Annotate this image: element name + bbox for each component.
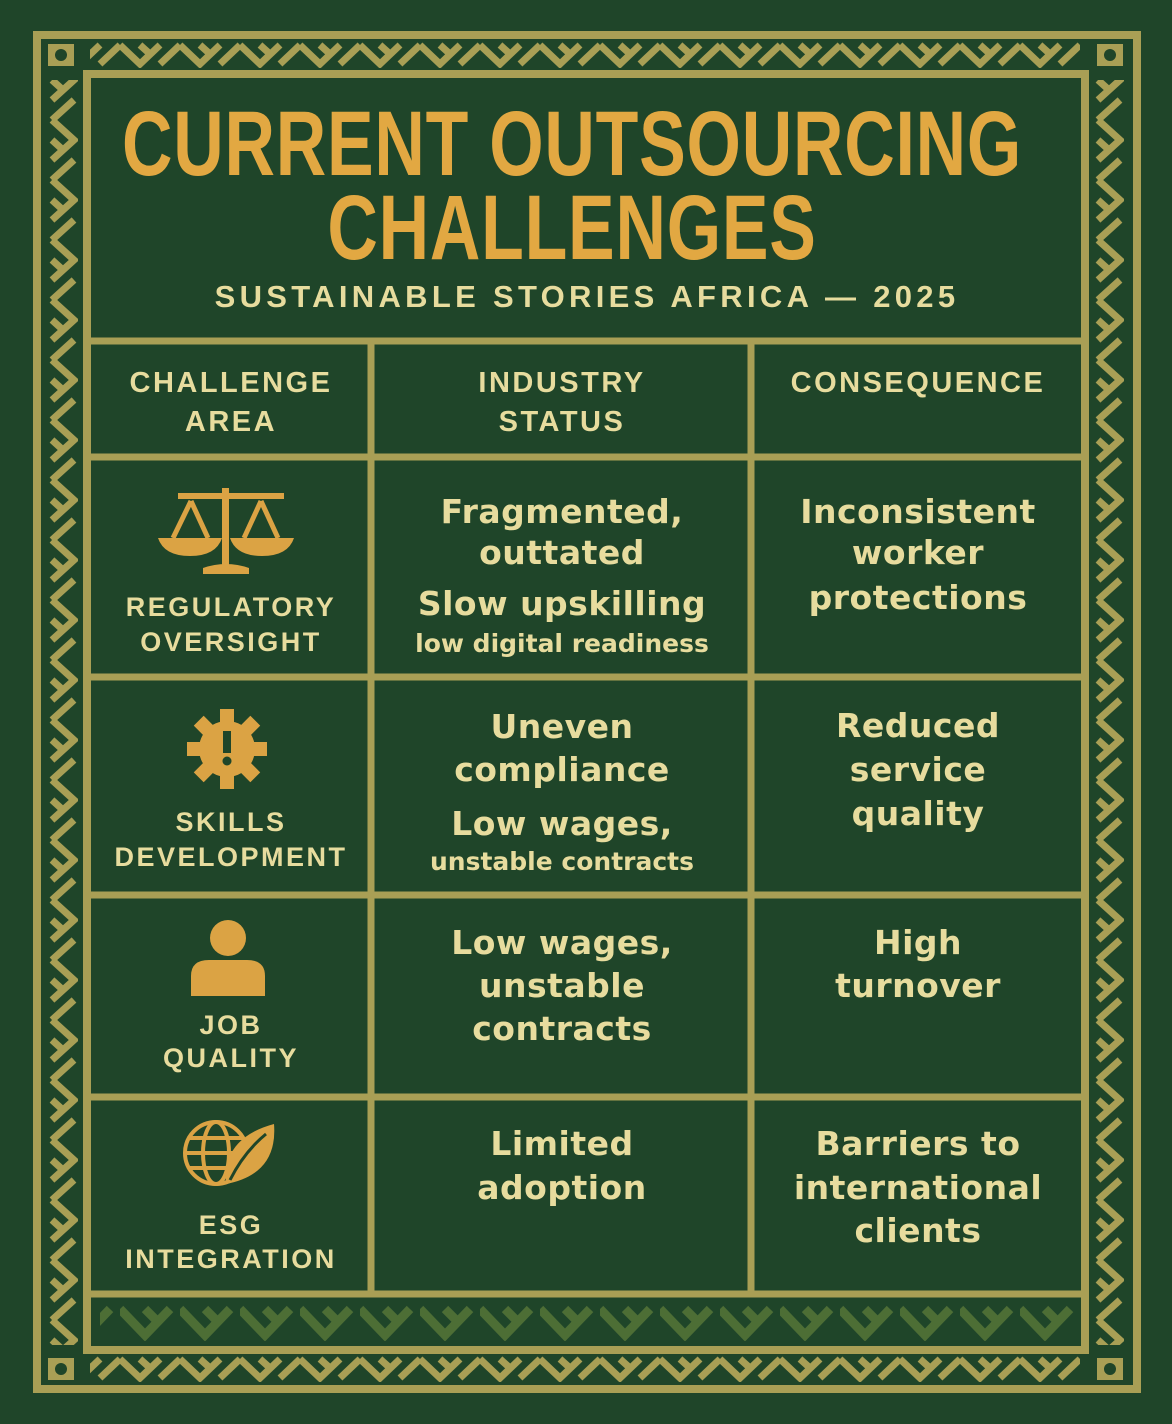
row: skills development: Low wages, [451,804,673,843]
row: regulatory oversight [126,488,1036,658]
header row [130,367,1045,438]
row: ESG integration: INTEGRATION [125,1244,337,1274]
icon: globe and leaf [183,1120,274,1186]
row: job quality [163,920,1001,1073]
consequence: Reduced [836,706,1000,745]
row: ESG integration: adoption [477,1168,647,1207]
header row: CHALLENGE [130,367,332,399]
consequence: Inconsistent [800,492,1036,531]
icon: person [191,920,265,996]
row: regulatory oversight: low digital readiness [415,629,709,658]
title [122,93,1022,279]
row: ESG integration: clients [854,1211,981,1250]
industry status: Low wages, [451,923,673,962]
industry status: Uneven [490,707,634,746]
row: skills development: service [850,750,986,789]
header row: CONSEQUENCE [791,367,1045,399]
row: regulatory oversight: outtated [479,533,645,572]
header row: AREA [185,406,277,438]
row: job quality: unstable [479,966,645,1005]
industry status: Fragmented, [441,492,683,531]
row: skills development: unstable contracts [430,847,694,876]
title: CURRENT OUTSOURCING [122,93,1022,195]
consequence: High [874,923,962,962]
industry status: Limited [490,1124,634,1163]
row: ESG integration [125,1120,1042,1274]
header row: INDUSTRY [478,367,646,399]
row: skills development: compliance [454,750,670,789]
row: job quality: QUALITY [163,1043,299,1073]
header row: STATUS [499,406,625,438]
label: ESG [199,1210,263,1240]
row: regulatory oversight: OVERSIGHT [140,627,322,657]
label: REGULATORY [126,592,336,622]
title: CHALLENGES [327,177,817,279]
consequence: Barriers to [815,1124,1020,1163]
row: regulatory oversight: Slow upskilling [418,584,706,623]
label: SKILLS [175,807,286,837]
icon: scales [158,488,294,574]
row: regulatory oversight: worker [852,533,984,572]
row: skills development: quality [852,794,984,833]
row: skills development [114,706,1000,876]
label: JOB [199,1010,263,1040]
row: job quality: turnover [835,966,1001,1005]
row: job quality: contracts [472,1009,652,1048]
subtitle: SUSTAINABLE STORIES AFRICA — 2025 [215,279,959,314]
icon: gear with exclamation [187,709,267,789]
row: regulatory oversight: protections [809,578,1027,617]
row: ESG integration: international [794,1168,1042,1207]
row: skills development: DEVELOPMENT [114,842,348,872]
